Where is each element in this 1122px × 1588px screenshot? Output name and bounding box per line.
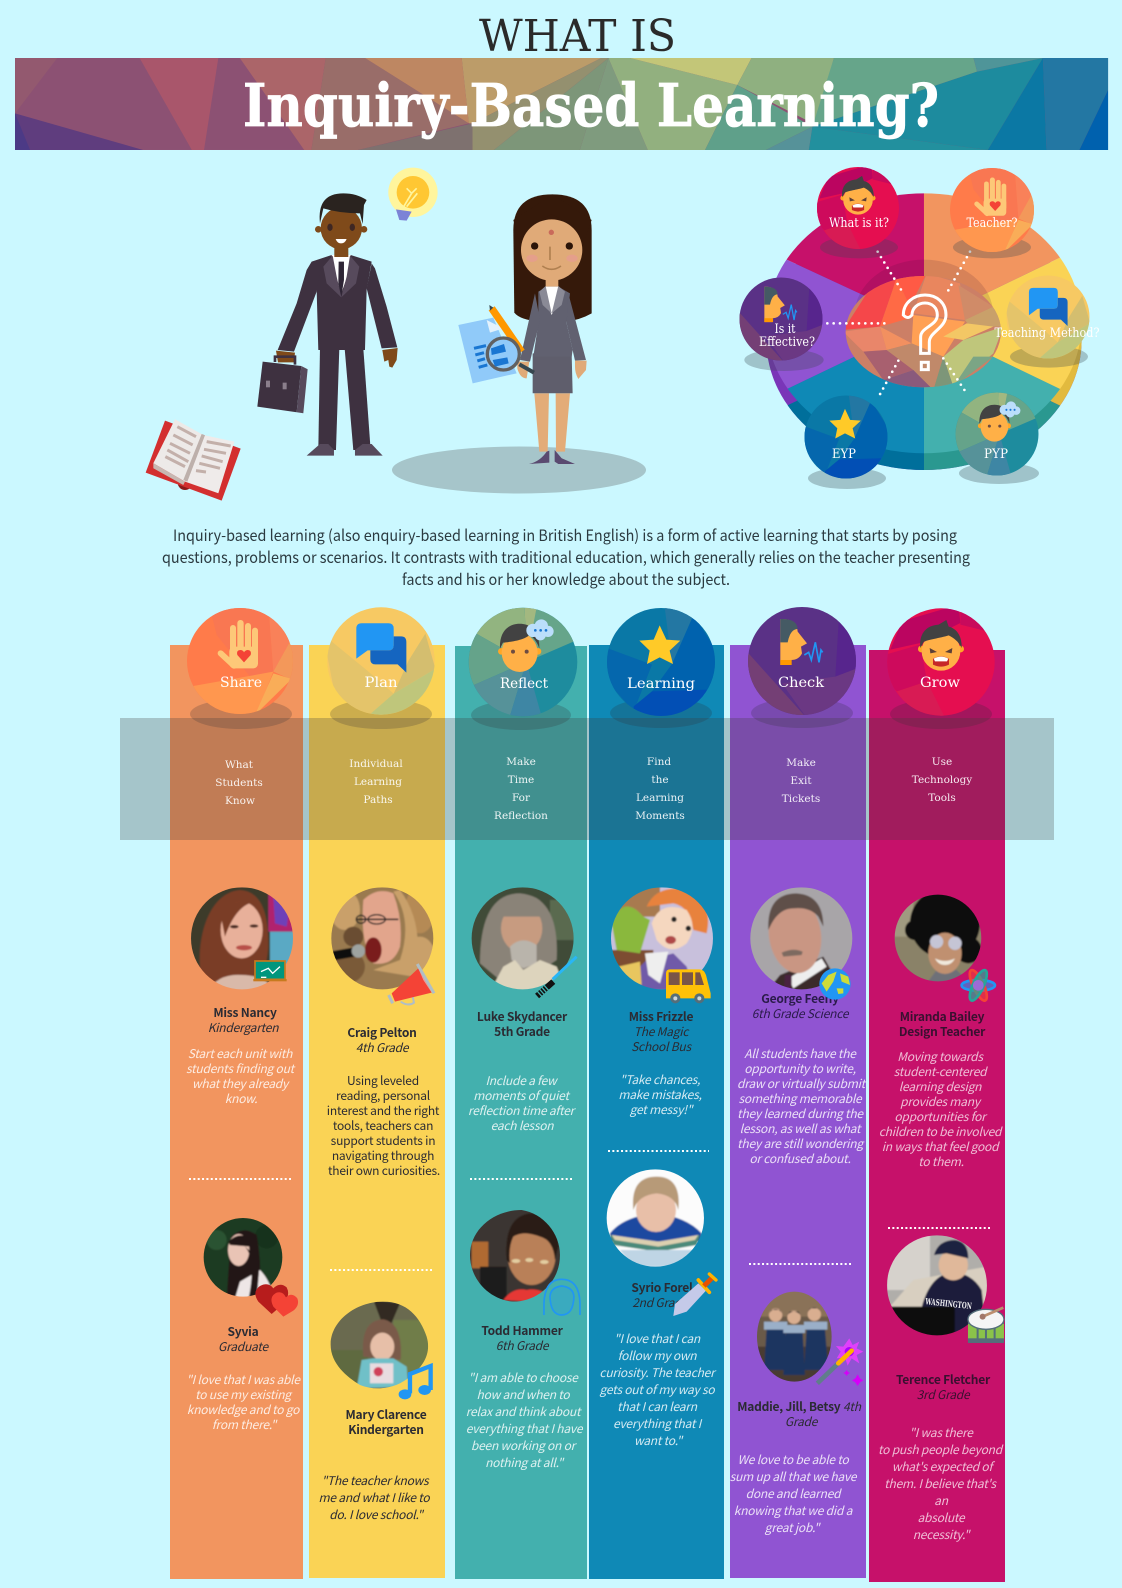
connecting dots: [827, 252, 970, 397]
band text: plan: [349, 758, 403, 806]
grade: 3rd grade: 3rd Grade: [917, 1386, 971, 1403]
banner: [15, 58, 1108, 150]
name: syvia: Syvia: [228, 1323, 259, 1340]
band text: check: [782, 757, 820, 805]
quote: we love to be able: We love to be able to: [737, 1451, 849, 1468]
panel: reflect column content: [466, 887, 584, 1471]
panel: plan column content: [319, 887, 440, 1523]
quote: i love that i can: "I love that I can: [614, 1330, 701, 1347]
quote: i was there: an: [934, 1492, 949, 1509]
text: using leveled reading: tools, teachers can: [333, 1117, 433, 1134]
quote: i was there: what's expected of: [892, 1458, 995, 1475]
grade: magic school bus: [631, 1023, 692, 1055]
circle: grow: [884, 605, 999, 718]
quote: i love that: "I love that I was able: [186, 1371, 301, 1388]
quote: i was there: absolute: [918, 1509, 966, 1526]
circle: plan: Plan: [364, 675, 398, 691]
badge: what is it: What is it?: [829, 216, 889, 231]
badge: is it effective: [737, 276, 823, 363]
quote: take chances: get messy!": [630, 1101, 694, 1118]
band text: plan: Learning: [354, 776, 402, 788]
banner polygon background: [15, 58, 1108, 150]
quote: moving towards: student-centered: [894, 1063, 988, 1080]
icon: magic wand: [817, 1338, 863, 1386]
name: miranda bailey: [899, 1008, 986, 1040]
icon: globe: [819, 968, 851, 1000]
quote: i love that i can: curiosity. The teacher: [599, 1364, 717, 1381]
name: mary clarence: Kindergarten: [348, 1421, 424, 1438]
quote: the teacher knows: "The teacher knows: [322, 1472, 430, 1489]
translucent band: [120, 718, 1054, 840]
grade: 6th grade science: 6th Grade Science: [752, 1005, 850, 1022]
icon: lightsaber: [533, 957, 577, 1000]
circle: check: Check: [778, 675, 825, 691]
photo: syvia: [204, 1218, 282, 1297]
quote: include a few: [468, 1072, 577, 1134]
quote: the teacher knows: me and what I like to: [319, 1489, 430, 1506]
icon: lightbulb: [388, 168, 438, 221]
badge: what is it: [814, 164, 902, 251]
photo: miss nancy: [190, 887, 295, 993]
icon: music note: [399, 1366, 431, 1399]
text: using leveled reading: [327, 1072, 440, 1179]
quote: include a few: reflection time after: [468, 1102, 577, 1119]
quote: i was there: necessity.": [913, 1526, 971, 1543]
banner title: Inquiry-Based Learning?: [243, 71, 939, 140]
band text: reflect: Time: [508, 774, 534, 786]
photo: mary clarence: [330, 1302, 428, 1388]
name: maddie jill betsy: Maddie, Jill, Betsy 4th: [737, 1398, 862, 1415]
icon: sword: [673, 1274, 716, 1316]
quote: i love that i can: want to.": [634, 1432, 684, 1449]
grade: graduate: Graduate: [218, 1338, 270, 1355]
photo: miss frizzle: [610, 887, 714, 991]
band text: learning: the: [651, 774, 669, 786]
photo: terence fletcher: [887, 1233, 988, 1337]
band text: plan: Individual: [349, 758, 403, 770]
quote: i love that: [186, 1371, 301, 1433]
band text: learning: Learning: [636, 792, 684, 804]
icon: chalkboard: [253, 961, 287, 981]
badge: teacher: [944, 166, 1040, 255]
name: miranda bailey: Miranda Bailey: [900, 1008, 985, 1025]
illustration: ground shadow: [392, 446, 646, 494]
quote: i was there: "I was there: [909, 1424, 974, 1441]
badge: pyp: PYP: [984, 447, 1008, 462]
name: luke skydancer: Luke Skydancer: [477, 1008, 568, 1025]
quote: moving towards: to them.: [918, 1153, 964, 1170]
hub shadow: [855, 260, 993, 370]
quote: i love that: to use my existing: [195, 1386, 293, 1403]
band text: learning: Moments: [635, 810, 685, 822]
panel: learning column content: [599, 887, 717, 1449]
name: syrio forel: Syrio Forel: [631, 1279, 693, 1296]
quote: start each unit: students finding out: [186, 1060, 296, 1077]
quote: i am able: been working on or: [471, 1437, 578, 1454]
grade: kindergarten: Kindergarten: [208, 1019, 279, 1036]
name: maddie jill betsy: [737, 1398, 862, 1430]
quote: i love that i can: gets out of my way so: [600, 1381, 715, 1398]
text: using leveled reading: their own curiosities.: [328, 1162, 440, 1179]
quote: moving towards: provides many: [900, 1093, 982, 1110]
circle: plan: [324, 605, 439, 719]
badge shadows: [744, 236, 1088, 489]
quote: all students: draw or virtually submit: [737, 1075, 867, 1092]
band text: check: Exit: [790, 775, 812, 787]
name: mary clarence: [346, 1406, 427, 1438]
icon: drum: [968, 1308, 1004, 1343]
badge: teacher: Teacher?: [966, 216, 1018, 231]
name: terence fletcher: Terence Fletcher: [896, 1371, 991, 1388]
icon: hair outline: [544, 1279, 580, 1315]
badge: eyp: EYP: [832, 447, 856, 462]
quote: i am able: [466, 1369, 584, 1471]
grade: magic school bus: The Magic: [634, 1023, 690, 1040]
intro paragraph: facts and his or her knowledge about the subject.: [402, 568, 730, 590]
name: miss frizzle: Miss Frizzle: [629, 1008, 693, 1025]
quote: we love to be able: sum up all that we have: [730, 1468, 858, 1485]
circle: grow: Grow: [920, 675, 960, 691]
name: craig pelton: Craig Pelton: [347, 1024, 417, 1041]
wheel edge: [768, 262, 1082, 470]
quote: include a few: Include a few: [485, 1072, 558, 1089]
badge: is it effective: Is it: [774, 322, 796, 337]
band text: learning: Find: [647, 756, 671, 768]
band text: learning: [635, 756, 685, 822]
band text: reflect: Reflection: [494, 810, 548, 822]
band text: reflect: [494, 756, 548, 822]
name: mary clarence: Mary Clarence: [346, 1406, 427, 1423]
photo: craig pelton: [328, 887, 435, 991]
circle: share: Share: [220, 675, 262, 691]
band text: reflect: For: [512, 792, 531, 804]
circle: reflect: Reflect: [500, 676, 548, 692]
name: luke skydancer: 5th Grade: [494, 1023, 550, 1040]
band text: plan: Paths: [363, 794, 393, 806]
quote: we love to be able: great job.": [765, 1519, 821, 1536]
illustration: woman with document: [458, 194, 592, 464]
name: luke skydancer: [477, 1008, 568, 1040]
badge: teaching method: [994, 274, 1100, 362]
band text: grow: Use: [932, 756, 952, 768]
quote: all students: or confused about.: [749, 1150, 851, 1167]
band text: grow: [912, 756, 972, 804]
wheel of questions: [744, 187, 1097, 489]
intro paragraph: questions, problems or scenarios. It contrasts with traditional education, which generally relies on the teacher presenting: [162, 546, 970, 568]
quote: all students: lesson, as well as what: [740, 1120, 862, 1137]
quote: i love that i can: that I can learn: [617, 1398, 698, 1415]
quote: start each unit: [186, 1045, 296, 1107]
quote: i was there: to push people beyond: [878, 1441, 1004, 1458]
quote: i was there: [878, 1424, 1004, 1543]
quote: i am able: everything that I have: [466, 1420, 584, 1437]
question mark: [903, 295, 946, 370]
quote: i am able: how and when to: [477, 1386, 570, 1403]
band text: check: Make: [786, 757, 816, 769]
quote: all students: something memorable: [739, 1090, 863, 1107]
grade: 6th grade: 6th Grade: [496, 1337, 550, 1354]
quote: all students: [737, 1045, 867, 1167]
quote: i love that: knowledge and to go: [187, 1401, 300, 1418]
circle: learning: Learning: [627, 676, 695, 692]
band text: share: What: [225, 759, 254, 771]
quote: include a few: each lesson: [491, 1117, 554, 1134]
band text: share: [215, 759, 263, 807]
icon: megaphone: [389, 964, 434, 1004]
briefcase: [257, 357, 308, 413]
quote: take chances: [618, 1071, 702, 1118]
photo: terence fletcher: WASHINGTON: [924, 1297, 972, 1312]
band text: reflect: Make: [506, 756, 536, 768]
grade: magic school bus: School Bus: [631, 1038, 692, 1055]
quote: start each unit: Start each unit with: [188, 1045, 293, 1062]
name: miranda bailey: Design Teacher: [899, 1023, 986, 1040]
badge: teaching method: Teaching Method?: [994, 326, 1100, 341]
photo: todd hammer: [468, 1208, 562, 1303]
icon: hearts: [255, 1284, 298, 1317]
grade: 2nd grade: 2nd Grade: [632, 1294, 689, 1311]
text: using leveled reading: reading, personal: [336, 1087, 430, 1104]
photo: george feeny: [748, 887, 854, 992]
quote: include a few: moments of quiet: [473, 1087, 570, 1104]
photo: miranda bailey: [894, 894, 982, 982]
quote: moving towards: children to be involved: [879, 1123, 1003, 1140]
panel: share column content: [186, 887, 301, 1433]
quote: moving towards: learning design: [899, 1078, 982, 1095]
quote: i am able: relax and think about: [466, 1403, 582, 1420]
quote: moving towards: [879, 1048, 1003, 1170]
quote: i love that i can: everything that I: [613, 1415, 703, 1432]
quote: start each unit: what they already: [192, 1075, 290, 1092]
quote: we love to be able: knowing that we did a: [734, 1502, 854, 1519]
icon: school bus: [666, 969, 711, 1003]
text: using leveled reading: navigating through: [332, 1147, 434, 1164]
wheel segments: [773, 193, 1080, 454]
text: using leveled reading: Using leveled: [347, 1072, 419, 1089]
quote: i am able: "I am able to choose: [468, 1369, 579, 1386]
quote: start each unit: know.: [225, 1090, 257, 1107]
circle: learning: [604, 605, 719, 718]
band text: check: Tickets: [782, 793, 820, 805]
quote: we love to be able: [730, 1451, 858, 1536]
illustration: man with briefcase: [257, 193, 398, 456]
title: what is: WHAT IS: [479, 11, 676, 62]
band text: share: Students: [215, 777, 263, 789]
quote: i love that: from there.": [212, 1416, 278, 1433]
quote: the teacher knows: do. I love school.": [329, 1506, 424, 1523]
band text: grow: Tools: [928, 792, 956, 804]
quote: all students: opportunity to write,: [744, 1060, 856, 1077]
band text: grow: Technology: [912, 774, 972, 786]
name: miss nancy: Miss Nancy: [213, 1004, 277, 1021]
photo: maddie jill betsy: [755, 1290, 835, 1383]
badge: pyp: [954, 391, 1040, 479]
quote: i love that i can: [599, 1330, 717, 1449]
badge: is it effective: Effective?: [759, 335, 815, 350]
document: [458, 305, 534, 383]
circle shadows: [190, 698, 992, 730]
quote: take chances: make mistakes,: [618, 1086, 702, 1103]
panel: grow column content: [878, 888, 1004, 1543]
panel: check column content: [730, 887, 867, 1536]
quote: we love to be able: done and learned: [746, 1485, 842, 1502]
icon: atom: [962, 968, 995, 1003]
grade: 4th grade: 4th Grade: [356, 1039, 410, 1056]
intro paragraph: [162, 524, 970, 590]
name: maddie jill betsy: Grade: [785, 1413, 819, 1430]
intro paragraph: Inquiry-based learning (also enquiry-based learning in British English) is a form of active learning that starts by posing: [173, 524, 957, 546]
hub mosaic: [843, 273, 1003, 390]
circle: check: [745, 605, 857, 718]
text: using leveled reading: interest and the right: [327, 1102, 440, 1119]
circle: reflect: [466, 605, 580, 720]
quote: take chances: "Take chances,: [620, 1071, 700, 1088]
text: using leveled reading: support students in: [331, 1132, 435, 1149]
quote: all students: they are still wondering: [737, 1135, 865, 1152]
quote: moving towards: in ways that feel good: [882, 1138, 1000, 1155]
band text: share: Know: [225, 795, 255, 807]
badge: eyp: [802, 393, 890, 480]
quote: the teacher knows: [319, 1472, 430, 1523]
photo: boy reading: [605, 1168, 705, 1268]
quote: moving towards: Moving towards: [897, 1048, 984, 1065]
quote: i am able: nothing at all.": [485, 1454, 564, 1471]
quote: all students: All students have the: [744, 1045, 857, 1062]
name: todd hammer: Todd Hammer: [481, 1322, 564, 1339]
name: george feeny: George Feeny: [761, 990, 839, 1007]
quote: all students: they learned during the: [737, 1105, 864, 1122]
quote: moving towards: opportunities for: [894, 1108, 988, 1125]
quote: i love that i can: follow my own: [618, 1347, 697, 1364]
circle: share: [180, 605, 300, 718]
icon: open book: [146, 419, 241, 501]
quote: i was there: them. I believe that's: [884, 1475, 997, 1492]
column backgrounds: [170, 645, 1005, 1582]
photo: luke skydancer: [470, 887, 577, 992]
